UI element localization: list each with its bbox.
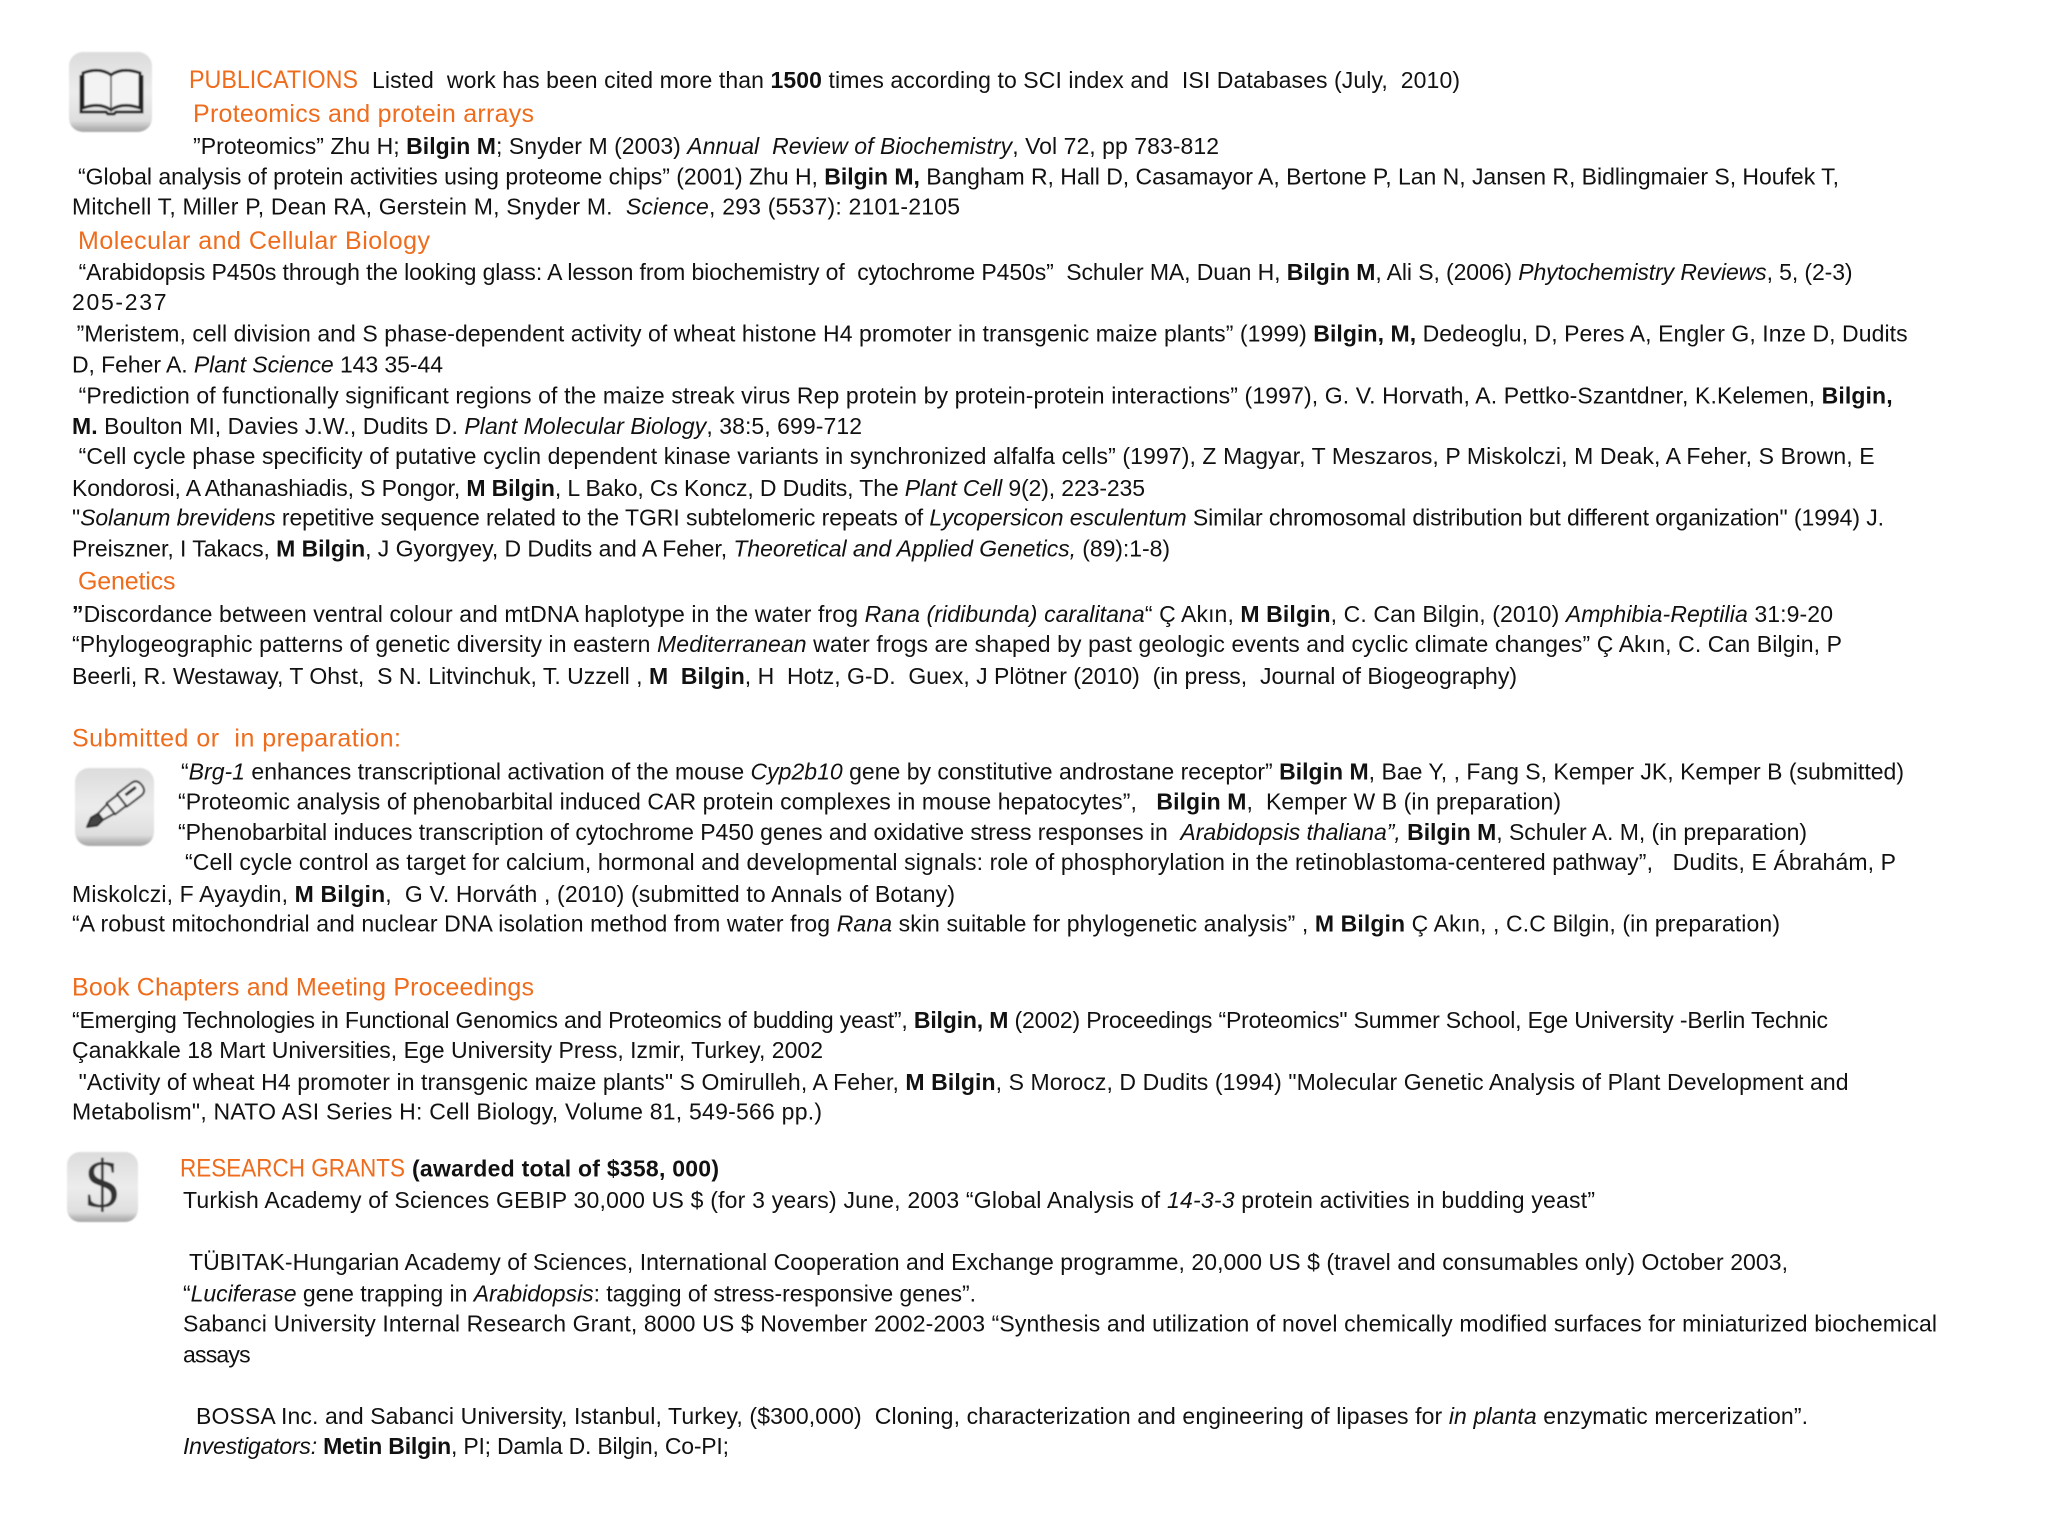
text block: book chapters: Metabolism", NATO ASI Series H: Cell Biology, Volume 81, 549-566 pp.): [72, 1099, 822, 1125]
heading: submitted or in preparation: Submitted or in preparation:: [72, 725, 401, 753]
text block: molecular and cellular biology references: "Solanum brevidens repetitive sequence related to the TGRI subtelomeric repeats of Lycopersicon esculentum Similar chromosomal distribution but different organization" (1994) J.: [72, 505, 1884, 531]
heading: molecular and cellular biology: Molecular and Cellular Biology: [78, 227, 430, 255]
icon: dollar sign: [67, 1146, 138, 1222]
heading: research grants: [180, 1154, 719, 1182]
text block: genetics references: [72, 601, 1842, 689]
text block: genetics references: Beerli, R. Westaway, T Ohst, S N. Litvinchuk, T. Uzzell , M Bilgin, H Hotz, G-D. Guex, J Plötner (2010) (in press, Journal of Biogeography): [72, 663, 1517, 689]
text block: submitted references: “Phenobarbital induces transcription of cytochrome P450 genes and oxidative stress responses in Arabidopsis thaliana”, Bilgin M, Schuler A. M, (in preparation): [178, 819, 1807, 845]
text block: proteomics references: [72, 133, 1839, 220]
text block: grants list: Investigators: Metin Bilgin, PI; Damla D. Bilgin, Co-PI;: [183, 1433, 729, 1459]
text block: molecular and cellular biology references: D, Feher A. Plant Science 143 35-44: [72, 352, 443, 378]
text block: grants list: TÜBITAK-Hungarian Academy of Sciences, International Cooperation and Exchange programme, 20,000 US $ (travel and consumables only) October 2003,: [189, 1249, 1788, 1275]
icon: fountain pen: [75, 768, 154, 846]
text block: molecular and cellular biology references: M. Boulton MI, Davies J.W., Dudits D. Plant Molecular Biology, 38:5, 699-712: [72, 413, 862, 439]
heading: publications intro: Listed work has been cited more than 1500 times according to SCI index and ISI Databases (July, 2010): [372, 67, 1460, 93]
heading: research grants: (awarded total of $358, 000): [412, 1155, 719, 1181]
text block: proteomics references: ”Proteomics” Zhu H; Bilgin M; Snyder M (2003) Annual Review of Biochemistry, Vol 72, pp 783-812: [193, 133, 1219, 159]
text block: genetics references: ”Discordance between ventral colour and mtDNA haplotype in the water frog Rana (ridibunda) caralitana“ Ç Akın, M Bilgin, C. Can Bilgin, (2010) Amphibia-Reptilia 31:9-20: [72, 601, 1833, 627]
text block: submitted references: Miskolczi, F Ayaydin, M Bilgin, G V. Horváth , (2010) (submitted to Annals of Botany): [72, 881, 955, 907]
text block: molecular and cellular biology references: “Arabidopsis P450s through the looking glass: A lesson from biochemistry of cytochrome P450s” Schuler MA, Duan H, Bilgin M, Ali S, (2006) Phytochemistry Reviews, 5, (2-3): [79, 259, 1853, 285]
text block: grants list: “Luciferase gene trapping in Arabidopsis: tagging of stress-responsive genes”.: [183, 1281, 976, 1307]
icon: book: [69, 52, 152, 132]
heading: research grants: RESEARCH GRANTS: [180, 1154, 405, 1182]
text block: grants list: BOSSA Inc. and Sabanci University, Istanbul, Turkey, ($300,000) Cloning, characterization and engineering of lipases for in planta enzymatic mercerization”.: [196, 1403, 1808, 1429]
text block: proteomics references: Mitchell T, Miller P, Dean RA, Gerstein M, Snyder M. Science, 293 (5537): 2101-2105: [72, 194, 960, 220]
text block: grants list: Turkish Academy of Sciences GEBIP 30,000 US $ (for 3 years) June, 2003 “Global Analysis of 14-3-3 protein activities in budding yeast”: [183, 1187, 1595, 1213]
heading: book chapters and meeting proceedings: Book Chapters and Meeting Proceedings: [72, 973, 534, 1001]
panel: book chapters and meeting proceedings: [72, 973, 1849, 1125]
panel: publications: [72, 66, 1908, 689]
text block: book chapters: “Emerging Technologies in Functional Genomics and Proteomics of budding yeast”, Bilgin, M (2002) Proceedings “Proteomics" Summer School, Ege University -Berlin Technic: [72, 1007, 1828, 1033]
heading: genetics: Genetics: [78, 567, 176, 595]
text block: grants list: assays: [183, 1341, 251, 1367]
text block: book chapters: [72, 1007, 1849, 1125]
text block: molecular and cellular biology references: Kondorosi, A Athanashiadis, S Pongor, M Bilgin, L Bako, Cs Koncz, D Dudits, The Plant Cell 9(2), 223-235: [72, 475, 1145, 501]
heading: publications intro: PUBLICATIONS: [189, 66, 358, 94]
icon: dollar sign: $: [85, 1146, 119, 1222]
text block: submitted references: “Brg-1 enhances transcriptional activation of the mouse Cyp2b10 gene by constitutive androstane receptor” Bilgin M, Bae Y, , Fang S, Kemper JK, Kemper B (submitted): [181, 758, 1904, 784]
text block: submitted references: “A robust mitochondrial and nuclear DNA isolation method from water frog Rana skin suitable for phylogenetic analysis” , M Bilgin Ç Akın, , C.C Bilgin, (in preparation): [72, 911, 1780, 937]
text block: molecular and cellular biology references: ”Meristem, cell division and S phase-dependent activity of wheat histone H4 promoter in transgenic maize plants” (1999) Bilgin, M, Dedeoglu, D, Peres A, Engler G, Inze D, Dudits: [77, 320, 1908, 346]
text block: submitted references: [72, 758, 1904, 937]
panel: research grants: [67, 1146, 1937, 1459]
text block: molecular and cellular biology references: 205-237: [72, 289, 166, 315]
text block: submitted references: “Cell cycle control as target for calcium, hormonal and developmental signals: role of phosphorylation in the retinoblastoma-centered pathway”, Dudits, E Ábrahám, P: [185, 849, 1896, 875]
text block: grants list: [183, 1187, 1937, 1459]
text block: molecular and cellular biology references: “Cell cycle phase specificity of putative cyclin dependent kinase variants in synchronized alfalfa cells” (1997), Z Magyar, T Meszaros, P Miskolczi, M Deak, A Feher, S Brown, E: [79, 443, 1875, 469]
text block: molecular and cellular biology references: [72, 259, 1908, 562]
text block: book chapters: "Activity of wheat H4 promoter in transgenic maize plants" S Omirulleh, A Feher, M Bilgin, S Morocz, D Dudits (1994) "Molecular Genetic Analysis of Plant Development and: [79, 1069, 1849, 1095]
text block: book chapters: Çanakkale 18 Mart Universities, Ege University Press, Izmir, Turkey, 2002: [72, 1037, 823, 1063]
heading: proteomics and protein arrays: Proteomics and protein arrays: [193, 100, 534, 128]
panel: submitted or in preparation: [72, 725, 1904, 937]
text block: submitted references: “Proteomic analysis of phenobarbital induced CAR protein complexes in mouse hepatocytes”, Bilgin M, Kemper W B (in preparation): [178, 788, 1561, 814]
text block: grants list: Sabanci University Internal Research Grant, 8000 US $ November 2002-2003 “Synthesis and utilization of novel chemically modified surfaces for miniaturized biochemical: [183, 1311, 1937, 1337]
text block: molecular and cellular biology references: “Prediction of functionally significant regions of the maize streak virus Rep protein by protein-protein interactions” (1997), G. V. Horvath, A. Pettko-Szantdner, K.Kelemen, Bilgin,: [79, 382, 1893, 408]
text block: proteomics references: “Global analysis of protein activities using proteome chips” (2001) Zhu H, Bilgin M, Bangham R, Hall D, Casamayor A, Bertone P, Lan N, Jansen R, Bidlingmaier S, Houfek T,: [78, 164, 1839, 190]
text block: genetics references: “Phylogeographic patterns of genetic diversity in eastern Mediterranean water frogs are shaped by past geologic events and cyclic climate changes” Ç Akın, C. Can Bilgin, P: [72, 631, 1842, 657]
text block: molecular and cellular biology references: Preiszner, I Takacs, M Bilgin, J Gyorgyey, D Dudits and A Feher, Theoretical and Applied Genetics, (89):1-8): [72, 536, 1170, 562]
